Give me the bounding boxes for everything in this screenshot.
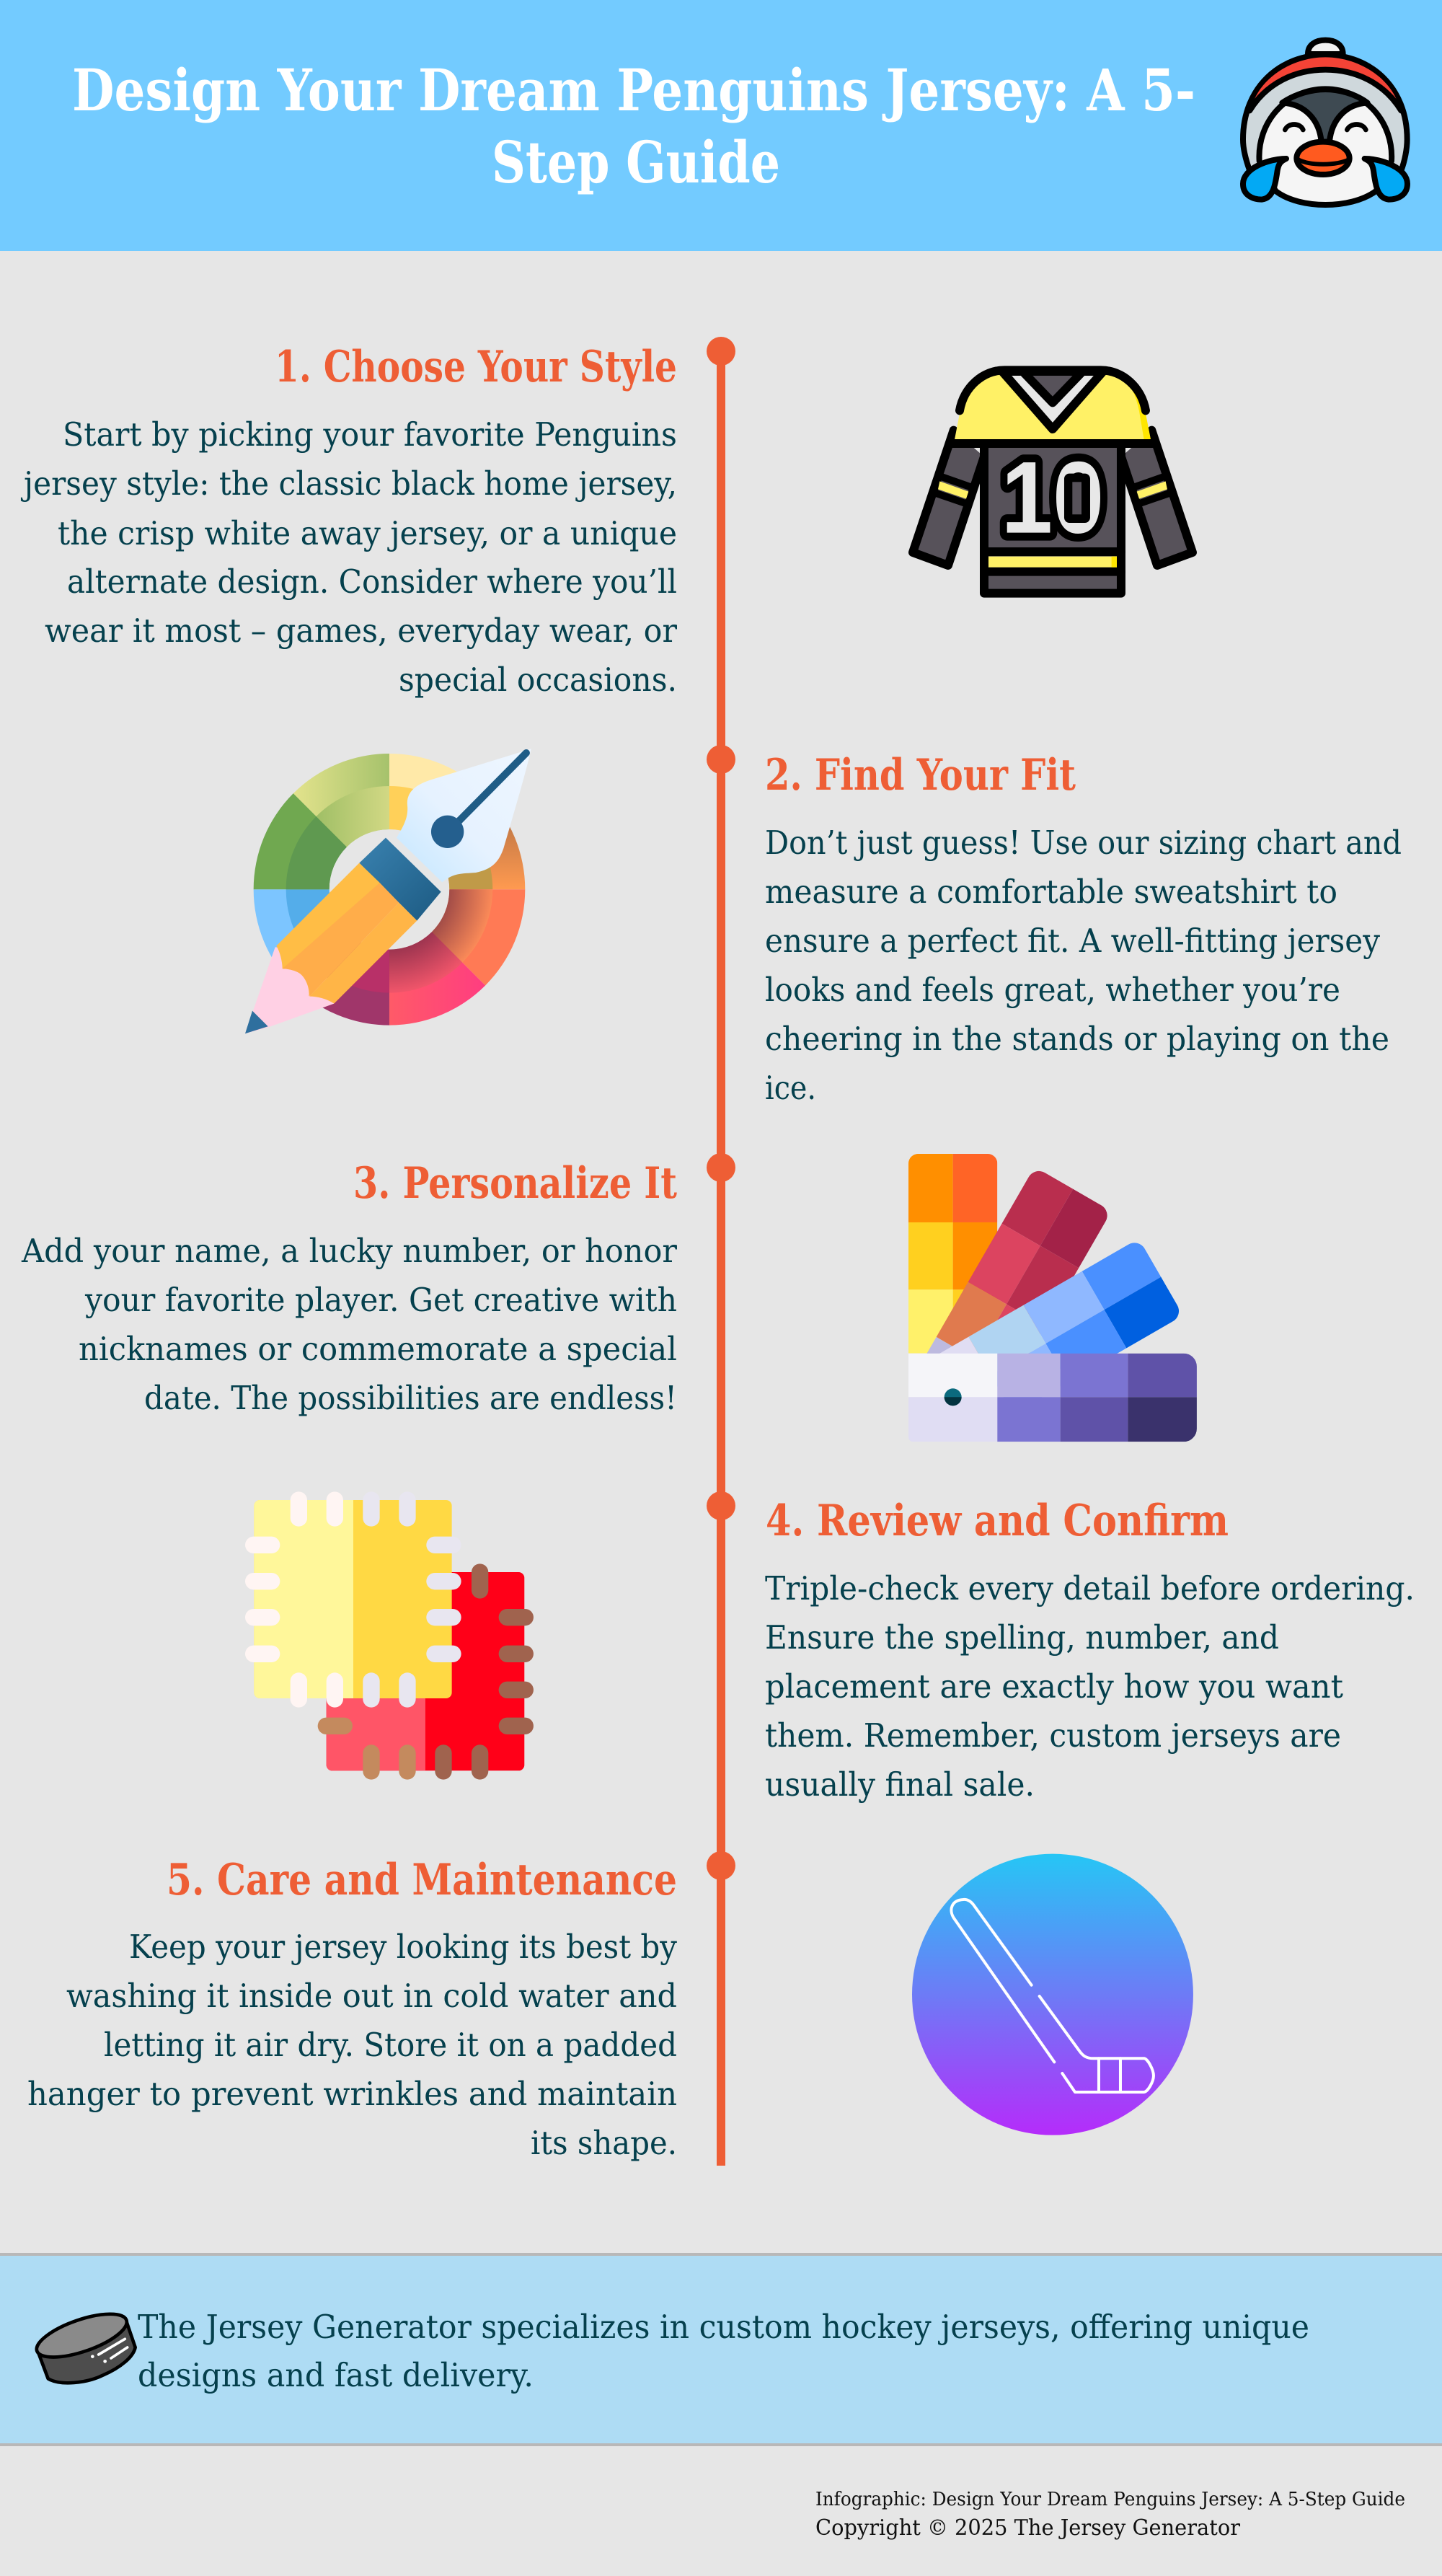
footer credits: [815, 2489, 1405, 2541]
step 5 text: washing it inside out in cold water and: [66, 1977, 677, 2015]
icon: hockey jersey number 10: [913, 370, 1193, 594]
step 2 text: Don’t just guess! Use our sizing chart and: [765, 824, 1402, 862]
step 5 text: Keep your jersey looking its best by: [129, 1928, 678, 1966]
step 1 text: the crisp white away jersey, or a unique: [58, 514, 677, 552]
icon: stitched fabric patches: [245, 1491, 534, 1780]
step 5 text: hanger to prevent wrinkles and maintain: [27, 2075, 677, 2113]
step 2 text: looks and feels great, whether you’re: [765, 971, 1340, 1009]
step 1 text: 1. Choose Your Style: [275, 342, 677, 392]
icon: hockey stick in gradient circle: [912, 1854, 1193, 2135]
step 5 text: 5. Care and Maintenance: [167, 1855, 677, 1905]
icon: colour swatch fan: [908, 1154, 1197, 1442]
step 3 text: Add your name, a lucky number, or honor: [21, 1232, 677, 1270]
footer credits: Infographic: Design Your Dream Penguins Jersey: A 5-Step Guide: [815, 2489, 1405, 2510]
footer credits: Copyright © 2025 The Jersey Generator: [815, 2515, 1241, 2541]
step 1 text: Start by picking your favorite Penguins: [63, 415, 677, 454]
step 4 text: usually final sale.: [765, 1765, 1035, 1804]
step 3 text: nicknames or commemorate a special: [79, 1330, 677, 1368]
title: Design Your Dream Penguins Jersey: A 5-: [72, 56, 1195, 124]
step 5 text: letting it air dry. Store it on a padded: [104, 2026, 677, 2064]
step 1 text: special occasions.: [399, 661, 677, 699]
step 5 text: [27, 1855, 678, 2162]
step 4 text: Triple-check every detail before ordering.: [765, 1569, 1415, 1607]
step 4 text: Ensure the spelling, number, and: [765, 1618, 1279, 1657]
header banner: [0, 0, 1442, 251]
step 4 text: them. Remember, custom jerseys are: [765, 1716, 1341, 1755]
step 3 text: date. The possibilities are endless!: [144, 1379, 677, 1417]
step 2 text: ensure a perfect fit. A well-fitting jersey: [765, 922, 1381, 960]
call-out text: The Jersey Generator specializes in custom hockey jerseys, offering unique: [138, 2308, 1309, 2346]
step 2 text: ice.: [765, 1069, 816, 1107]
step 3 text: your favorite player. Get creative with: [84, 1281, 677, 1319]
step 1 text: jersey style: the classic black home jersey,: [20, 464, 677, 503]
title: Step Guide: [492, 128, 780, 196]
step 4 text: placement are exactly how you want: [765, 1667, 1343, 1706]
icon: colour wheel with pen and pencil: [245, 749, 531, 1033]
icon: hockey jersey number 10: 10: [1001, 441, 1104, 555]
call-out text: designs and fast delivery.: [138, 2356, 534, 2394]
call-out band: about The Jersey Generator: [0, 2253, 1442, 2446]
step 3 text: 3. Personalize It: [353, 1158, 677, 1209]
step 1 text: wear it most – games, everyday wear, or: [45, 612, 677, 650]
call-out text: [138, 2308, 1309, 2394]
icon: hockey puck: [32, 2305, 136, 2383]
step 2 text: 2. Find Your Fit: [765, 750, 1076, 800]
step 5 text: its shape.: [531, 2124, 677, 2162]
step 1 text: alternate design. Consider where you’ll: [67, 563, 677, 601]
central timeline: [707, 337, 735, 2166]
step 2 text: measure a comfortable sweatshirt to: [765, 873, 1337, 911]
step 4 text: 4. Review and Confirm: [766, 1496, 1229, 1546]
icon: laughing penguin with hat: [1243, 40, 1407, 205]
step 4 text: [765, 1496, 1415, 1804]
title: [72, 56, 1195, 196]
step 2 text: [765, 750, 1402, 1107]
step 3 text: [21, 1158, 677, 1417]
step 1 text: [20, 342, 677, 699]
step 2 text: cheering in the stands or playing on the: [765, 1020, 1389, 1058]
